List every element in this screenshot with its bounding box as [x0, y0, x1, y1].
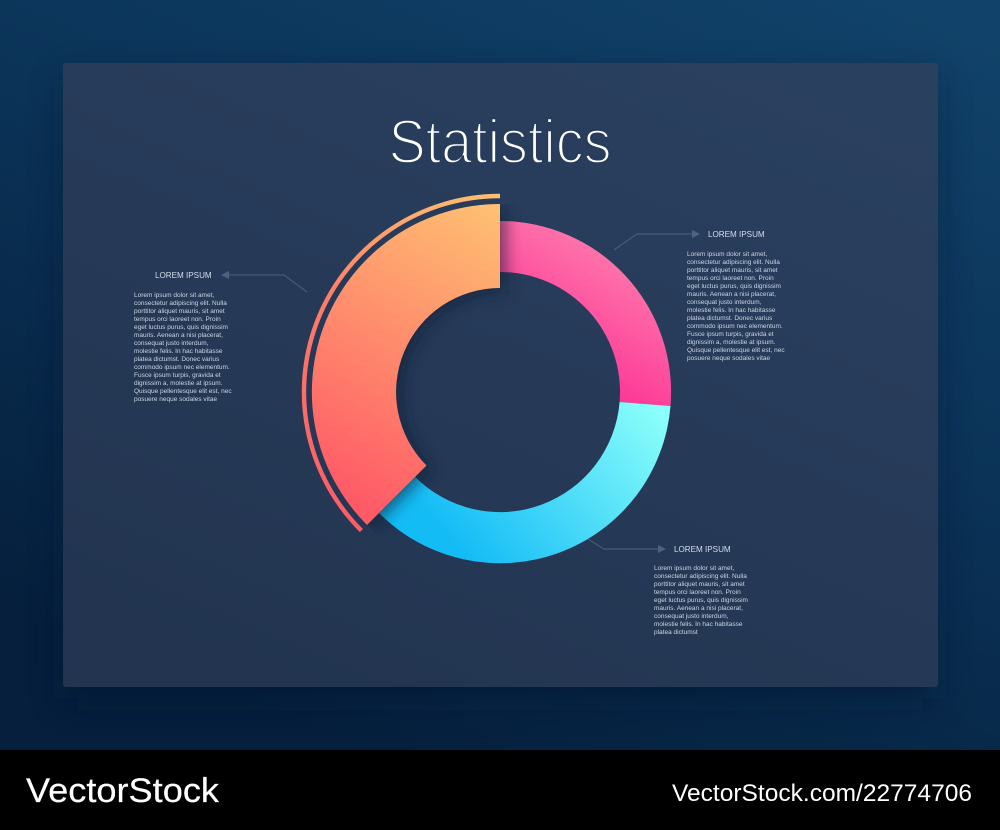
text block: Quisque pellentesque elit est, nec [134, 388, 232, 395]
text block: tempus orci laoreet non. Proin [134, 316, 221, 323]
segment: cyan [379, 402, 670, 563]
label: LOREM IPSUM [708, 230, 765, 239]
text block: tempus orci laoreet non. Proin [687, 275, 774, 282]
segment: orange [312, 204, 500, 525]
panel shadow [66, 80, 934, 698]
text block: mauris. Aenean a nisi placerat, [654, 605, 743, 612]
donut chart [304, 196, 671, 563]
text block: Fusce ipsum turpis, gravida et [134, 372, 221, 379]
text block: consectetur adipiscing elit. Nulla [654, 573, 747, 580]
segment: pink [500, 221, 671, 406]
text block: tempus orci laoreet non. Proin [654, 589, 741, 596]
text block: dignissim a, molestie at ipsum. [134, 380, 223, 387]
text block: Lorem ipsum dolor sit amet, [654, 565, 734, 572]
arrow [221, 271, 307, 292]
text block: consequat justo interdum, [687, 299, 762, 306]
footer bar [0, 750, 1000, 830]
callout: left [134, 271, 307, 403]
callout: bottom [588, 539, 748, 636]
text block: consequat justo interdum, [654, 613, 729, 620]
text block: platea dictumst [654, 629, 698, 636]
text block: mauris. Aenean a nisi placerat, [687, 291, 776, 298]
text block: posuere neque sodales vitae [134, 396, 218, 403]
text block: porttitor aliquet mauris, sit amet [134, 308, 225, 315]
footer url: VectorStock.com/22774706 [672, 780, 972, 807]
callout: right [614, 230, 785, 362]
title: Statistics [388, 108, 612, 177]
text block: porttitor aliquet mauris, sit amet [687, 267, 778, 274]
label: LOREM IPSUM [674, 545, 731, 554]
arrow [614, 230, 700, 250]
orange segment shadow [368, 206, 517, 526]
footer logo: VectorStock [26, 772, 220, 810]
text block: eget luctus purus, quis dignissim [654, 597, 748, 604]
thin outer arc [304, 196, 500, 531]
text block: molestie felis. In hac habitasse [134, 348, 223, 355]
text block: eget luctus purus, quis dignissim [134, 324, 228, 331]
text block: consectetur adipiscing elit. Nulla [687, 259, 780, 266]
text block: Lorem ipsum dolor sit amet, [687, 251, 767, 258]
text block: commodo ipsum nec elementum. [134, 364, 230, 371]
text block: consequat justo interdum, [134, 340, 209, 347]
text block: Quisque pellentesque elit est, nec [687, 347, 785, 354]
text block: eget luctus purus, quis dignissim [687, 283, 781, 290]
text block: posuere neque sodales vitae [687, 355, 771, 362]
text block: platea dictumst. Donec varius [134, 356, 220, 363]
label: LOREM IPSUM [155, 271, 212, 280]
text block: platea dictumst. Donec varius [687, 315, 773, 322]
text block: molestie felis. In hac habitasse [654, 621, 743, 628]
text block: commodo ipsum nec elementum. [687, 323, 783, 330]
panel [63, 63, 938, 687]
text block: mauris. Aenean a nisi placerat, [134, 332, 223, 339]
text block: dignissim a, molestie at ipsum. [687, 339, 776, 346]
text block: molestie felis. In hac habitasse [687, 307, 776, 314]
text block: Lorem ipsum dolor sit amet, [134, 292, 214, 299]
arrow [588, 539, 666, 553]
text block: Fusce ipsum turpis, gravida et [687, 331, 774, 338]
text block: consectetur adipiscing elit. Nulla [134, 300, 227, 307]
text block: porttitor aliquet mauris, sit amet [654, 581, 745, 588]
